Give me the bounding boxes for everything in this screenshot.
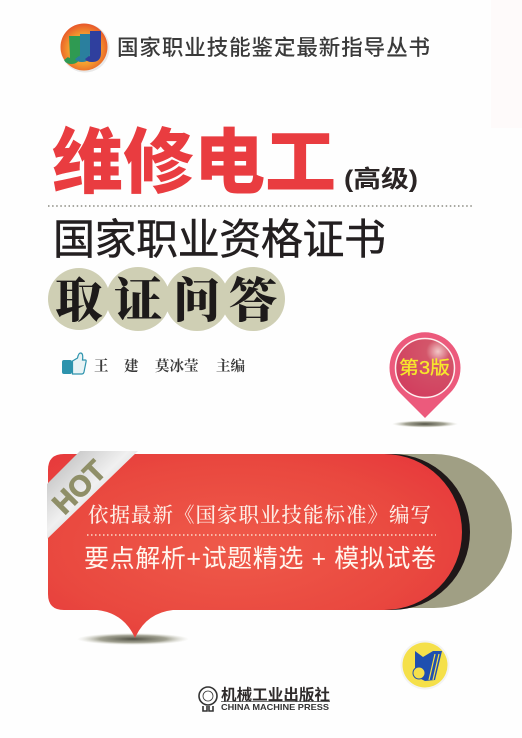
- authors: 建: [124, 357, 139, 375]
- main title: 维修电工: [52, 124, 336, 203]
- edition pin badge: [389, 332, 460, 428]
- authors: 王: [94, 358, 108, 375]
- publisher English name: CHINA MACHINE PRESS: [221, 702, 329, 712]
- heading: four circles with characters: 证: [114, 275, 162, 328]
- pale pink strip at top right: [491, 0, 522, 128]
- banner dotted divider: [87, 534, 436, 536]
- heading: four circles with characters: 问: [173, 275, 221, 328]
- dotted divider: [48, 205, 473, 207]
- banner: red callout with layered tabs: [47, 451, 512, 645]
- banner black band: [380, 454, 470, 610]
- icon: publisher emblem: [199, 687, 217, 711]
- banner back tab: [380, 454, 512, 608]
- series title: 国家职业技能鉴定最新指导丛书: [117, 36, 430, 60]
- icon: thumbs up: [62, 353, 86, 374]
- heading: four circles with characters: [48, 267, 285, 331]
- level label: (高级): [344, 166, 418, 193]
- heading: four circles with characters: 答: [229, 275, 277, 328]
- ribbon label: HOT: [47, 455, 113, 521]
- ribbon corner: [47, 451, 138, 539]
- icon: series logo: [60, 24, 110, 72]
- banner line one: 依据最新《国家职业技能标准》编写: [88, 504, 431, 527]
- red panel and pointer: [48, 454, 462, 638]
- authors: 主编: [216, 357, 245, 375]
- subtitle: 国家职业资格证书: [53, 216, 386, 263]
- shadow below pointer: [77, 633, 189, 645]
- authors: [94, 357, 245, 375]
- publisher rule: [221, 700, 330, 702]
- authors: 莫冰莹: [155, 357, 199, 375]
- heading: four circles with characters: 取: [55, 275, 103, 328]
- edition pin badge: 第3版: [399, 358, 450, 378]
- sticker: publisher award seal: [400, 640, 450, 690]
- publisher name: 机械工业出版社: [221, 685, 330, 704]
- banner line two: 要点解析+试题精选 + 模拟试卷: [84, 545, 436, 573]
